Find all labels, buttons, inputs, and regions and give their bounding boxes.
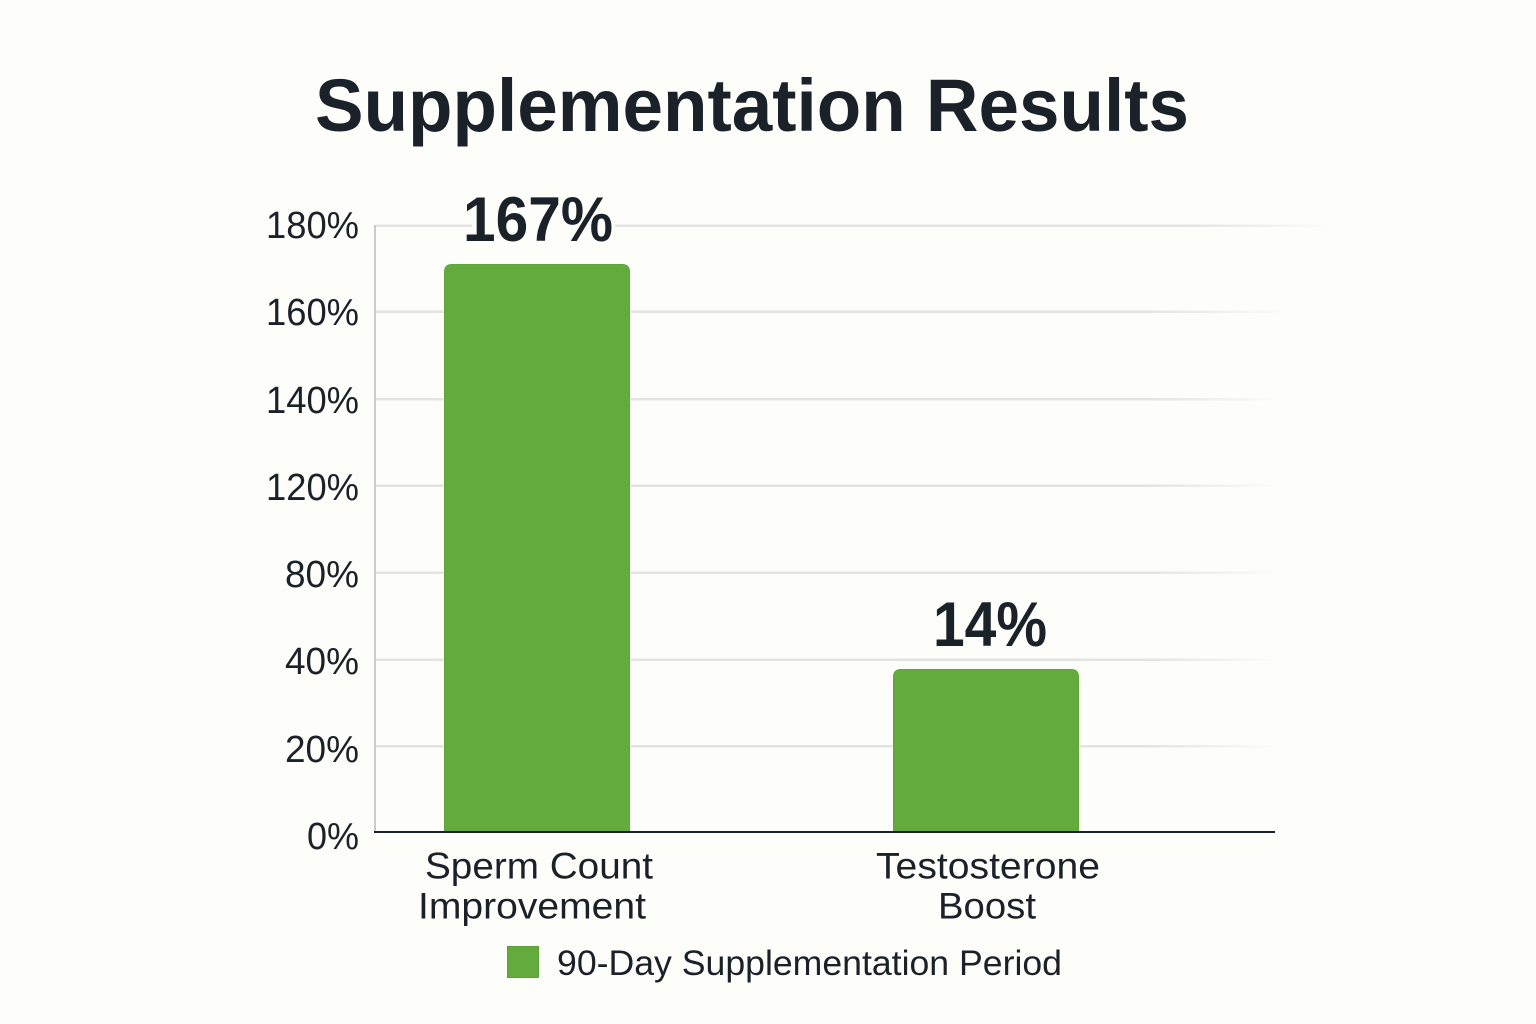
category label: testosterone boost: Testosterone (876, 846, 1100, 886)
legend (508, 944, 1062, 983)
y-axis labels: 20% (285, 729, 359, 771)
value label: 167%: 167% (463, 185, 613, 255)
y-axis labels: 140% (266, 380, 359, 422)
x axis (374, 831, 1275, 833)
y-axis labels: 40% (285, 641, 359, 683)
gridlines and axes (374, 223, 1330, 832)
bar: testosterone boost (894, 670, 1078, 832)
category label: testosterone boost (876, 846, 1100, 926)
y-axis labels: 0% (307, 816, 359, 858)
y-axis labels: 80% (285, 554, 359, 596)
category label: testosterone boost: Boost (938, 886, 1037, 926)
legend swatch (508, 946, 538, 978)
category label: sperm count improvement (418, 846, 654, 926)
bar: sperm count improvement (444, 264, 630, 832)
legend label: 90-Day Supplementation Period (557, 944, 1062, 983)
title: Supplementation Results (315, 64, 1189, 147)
category label: sperm count improvement: Sperm Count (425, 846, 654, 886)
y-axis labels: 180% (266, 205, 359, 247)
y-axis labels: 120% (266, 467, 359, 509)
category label: sperm count improvement: Improvement (418, 886, 647, 926)
value label: 14%: 14% (933, 590, 1047, 660)
y-axis labels: 160% (266, 292, 359, 334)
y-axis labels (266, 205, 359, 858)
